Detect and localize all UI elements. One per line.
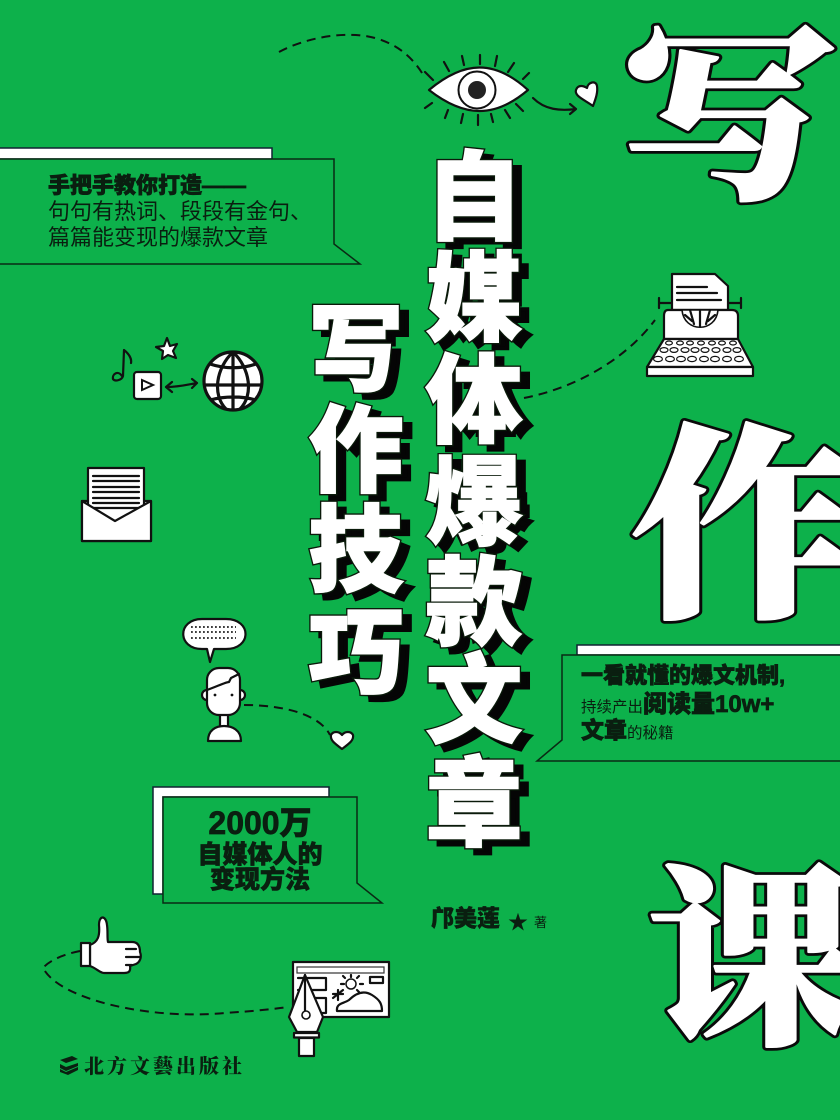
- large serif character: 写: 写: [622, 15, 838, 224]
- callout: top left: [0, 148, 360, 264]
- callout: top left: 手把手教你打造——: [48, 173, 246, 198]
- main title: 自媒体爆款文章: 爆: [426, 449, 522, 558]
- callout: 2000万: [153, 787, 382, 903]
- subtitle: 写作技巧: 技: [308, 499, 404, 605]
- icon: thumbs up with dashed line: [43, 918, 288, 1014]
- subtitle: 写作技巧: 技: [317, 505, 413, 611]
- subtitle: 写作技巧: 巧: [317, 607, 413, 713]
- callout: 2000万: 变现方法: [210, 865, 310, 894]
- main title: 自媒体爆款文章: 文: [426, 647, 522, 756]
- publisher logo and name: 北方文藝出版社: [84, 1054, 245, 1078]
- callout: top left: 句句有热词、段段有金句、: [48, 199, 312, 224]
- author: ★: [508, 912, 528, 934]
- icon: typewriter with dashed line: [524, 274, 753, 398]
- icon: eye with dashed path, arrow and heart: [279, 35, 597, 125]
- subtitle: 写作技巧: 巧: [308, 601, 404, 707]
- large serif character: 写: 写: [622, 15, 838, 224]
- subtitle: 写作技巧: 作: [308, 399, 404, 505]
- main title: 自媒体爆款文章: 款: [426, 549, 522, 658]
- main title: 自媒体爆款文章: 文: [434, 653, 532, 762]
- main title: 自媒体爆款文章: 章: [426, 750, 522, 859]
- subtitle: 写作技巧: 写: [308, 298, 404, 404]
- icon: pen nib with web page: [289, 962, 389, 1056]
- main title: 自媒体爆款文章: [426, 144, 532, 865]
- callout: top left: 篇篇能变现的爆款文章: [48, 225, 268, 250]
- main title: 自媒体爆款文章: 爆: [426, 449, 522, 558]
- subtitle: 写作技巧: 写: [317, 304, 413, 410]
- callout: right: 一看就懂的爆文机制,: [581, 663, 785, 688]
- icon: envelope with letter: [82, 468, 151, 541]
- main title: 自媒体爆款文章: 媒: [434, 251, 532, 360]
- main title: 自媒体爆款文章: 体: [426, 347, 522, 456]
- main title: 自媒体爆款文章: 文: [426, 647, 522, 756]
- main title: 自媒体爆款文章: 媒: [426, 245, 522, 354]
- author: 邝美莲: [431, 905, 500, 931]
- icon: music, play button, star and globe: [113, 338, 262, 410]
- subtitle: 写作技巧: 作: [317, 405, 413, 511]
- subtitle: 写作技巧: 技: [308, 499, 404, 605]
- main title: 自媒体爆款文章: 体: [426, 347, 522, 456]
- main title: 自媒体爆款文章: 自: [434, 150, 532, 259]
- subtitle: 写作技巧: 写: [308, 298, 404, 404]
- main title: 自媒体爆款文章: 自: [426, 144, 522, 253]
- subtitle: 写作技巧: [308, 298, 413, 713]
- main title: 自媒体爆款文章: 章: [426, 750, 522, 859]
- author: [431, 905, 547, 934]
- main title: 自媒体爆款文章: 媒: [426, 245, 522, 354]
- main title: 自媒体爆款文章: 体: [434, 353, 532, 462]
- subtitle: 写作技巧: 作: [308, 399, 404, 505]
- main title: 自媒体爆款文章: 款: [434, 555, 532, 664]
- subtitle: 写作技巧: 巧: [308, 601, 404, 707]
- callout: 2000万: 自媒体人的: [197, 841, 323, 869]
- main title: 自媒体爆款文章: 爆: [434, 455, 532, 564]
- author: 著: [534, 915, 547, 930]
- icon: person with speech bubble and heart: [183, 619, 353, 749]
- main title: 自媒体爆款文章: 章: [434, 756, 532, 865]
- callout: right: 持续产出阅读量10w+: [581, 691, 774, 718]
- callout: 2000万: 2000万: [208, 805, 312, 841]
- main title: 自媒体爆款文章: 自: [426, 144, 522, 253]
- main title: 自媒体爆款文章: 款: [426, 549, 522, 658]
- callout: right: 文章的秘籍: [581, 717, 674, 743]
- callout: right: [537, 645, 840, 761]
